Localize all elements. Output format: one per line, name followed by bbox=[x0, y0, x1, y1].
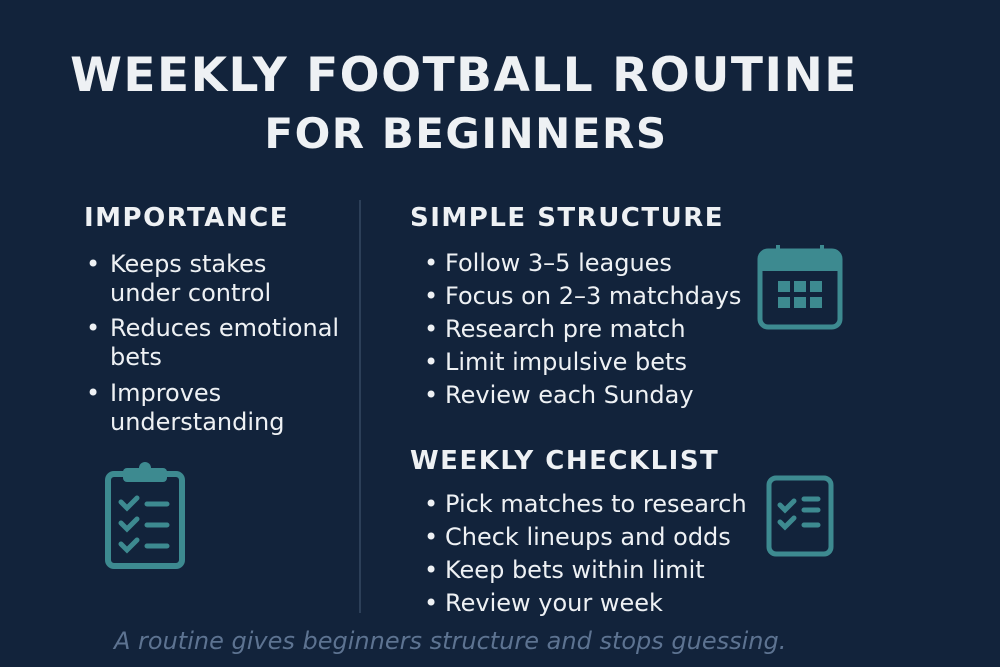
list: structure: Review each Sunday bbox=[445, 381, 694, 409]
list: importance: Keeps stakes bbox=[110, 250, 266, 278]
list: importance: under control bbox=[110, 279, 271, 307]
list: checklist: Pick matches to research bbox=[445, 490, 747, 518]
title bbox=[70, 48, 858, 158]
icon: clipboard bbox=[105, 462, 185, 569]
list: importance: bets bbox=[110, 343, 162, 371]
heading: importance: IMPORTANCE bbox=[84, 203, 289, 233]
list: checklist bbox=[428, 490, 747, 617]
list: structure: Focus on 2–3 matchdays bbox=[445, 282, 741, 310]
title: FOR BEGINNERS bbox=[264, 109, 668, 158]
heading: simple structure: SIMPLE STRUCTURE bbox=[410, 203, 724, 233]
list: structure: Research pre match bbox=[445, 315, 686, 343]
list: checklist: Check lineups and odds bbox=[445, 523, 731, 551]
panel: importance bbox=[84, 203, 339, 436]
panel: weekly checklist bbox=[410, 446, 747, 617]
divider bbox=[359, 200, 361, 613]
list: importance: Reduces emotional bbox=[110, 314, 339, 342]
list: structure bbox=[428, 249, 741, 409]
title: WEEKLY FOOTBALL ROUTINE bbox=[70, 48, 858, 103]
icon: calendar bbox=[758, 245, 842, 330]
panel: simple structure bbox=[410, 203, 741, 409]
list: structure: Follow 3–5 leagues bbox=[445, 249, 672, 277]
list: importance: Improves bbox=[110, 379, 221, 407]
list: importance: understanding bbox=[110, 408, 284, 436]
footer caption: A routine gives beginners structure and stops guessing. bbox=[114, 627, 786, 655]
list: importance bbox=[90, 250, 339, 436]
list: checklist: Keep bets within limit bbox=[445, 556, 705, 584]
list: structure: Limit impulsive bets bbox=[445, 348, 687, 376]
icon: checklist bbox=[766, 476, 834, 556]
heading: weekly checklist: WEEKLY CHECKLIST bbox=[410, 446, 719, 476]
list: checklist: Review your week bbox=[445, 589, 663, 617]
